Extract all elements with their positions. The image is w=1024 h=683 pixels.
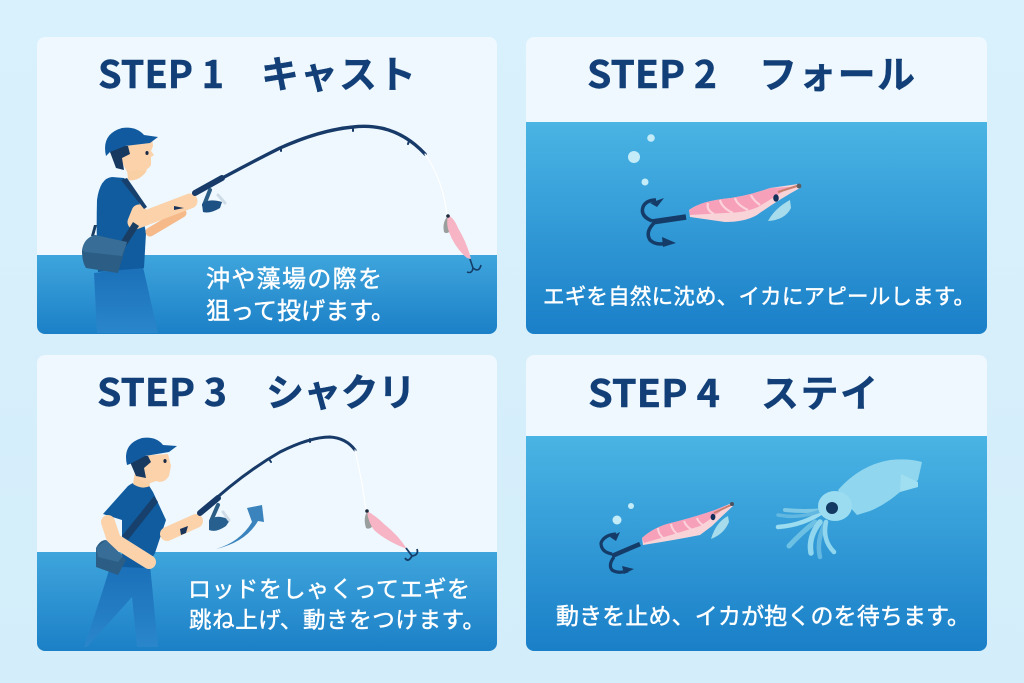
water: step 3 (37, 552, 497, 651)
caption: step 2: エギを自然に沈め、イカにアピールします。 (543, 285, 975, 309)
bubbles: step 4 (612, 503, 634, 524)
caption: step 4: 動きを止め、イカが抱くのを待ちます。 (556, 603, 970, 629)
egi lure: casting (444, 214, 481, 272)
fishing rod: bent (195, 126, 447, 215)
caption: step 1: 沖や藻場の際を (206, 266, 382, 293)
heading: step 4 (588, 363, 878, 418)
arrow: upward motion (216, 505, 264, 549)
heading: step 3: シャクリ (266, 362, 416, 417)
bubbles: step 2 (628, 134, 655, 186)
caption: step 3 (188, 576, 485, 633)
heading: step 4: ステイ (761, 363, 878, 418)
water: step 4 (526, 436, 987, 651)
heading: step 3 (97, 362, 416, 417)
heading: step 1: キャスト (261, 44, 416, 99)
water: step 2 (526, 122, 987, 334)
heading: step 2: STEP 2 (587, 44, 717, 99)
heading: step 1 (98, 44, 416, 99)
water: step 1 (37, 255, 497, 334)
angler: jerking (84, 438, 196, 647)
egi lure: staying (601, 502, 734, 574)
panel: step 2 fall (526, 37, 987, 334)
caption: step 3: ロッドをしゃくってエギを (188, 576, 470, 602)
egi lure: jerked (365, 509, 417, 560)
panel: step 1 cast (37, 37, 497, 334)
heading: step 2 (587, 44, 915, 99)
panel: step 4 stay (526, 355, 987, 651)
heading: step 2: フォール (759, 44, 915, 99)
heading: step 1: STEP 1 (98, 44, 224, 99)
heading: step 4: STEP 4 (588, 363, 720, 418)
caption: step 1 (206, 266, 395, 325)
fishing rod: lifted (200, 437, 366, 531)
angler: casting (82, 128, 190, 333)
panel: step 3 jerk (37, 355, 497, 651)
caption: step 3: 跳ね上げ、動きをつけます。 (189, 608, 485, 633)
heading: step 3: STEP 3 (97, 362, 227, 417)
squid (778, 459, 922, 557)
egi lure: falling (642, 184, 801, 247)
caption: step 1: 狙って投げます。 (206, 298, 395, 325)
